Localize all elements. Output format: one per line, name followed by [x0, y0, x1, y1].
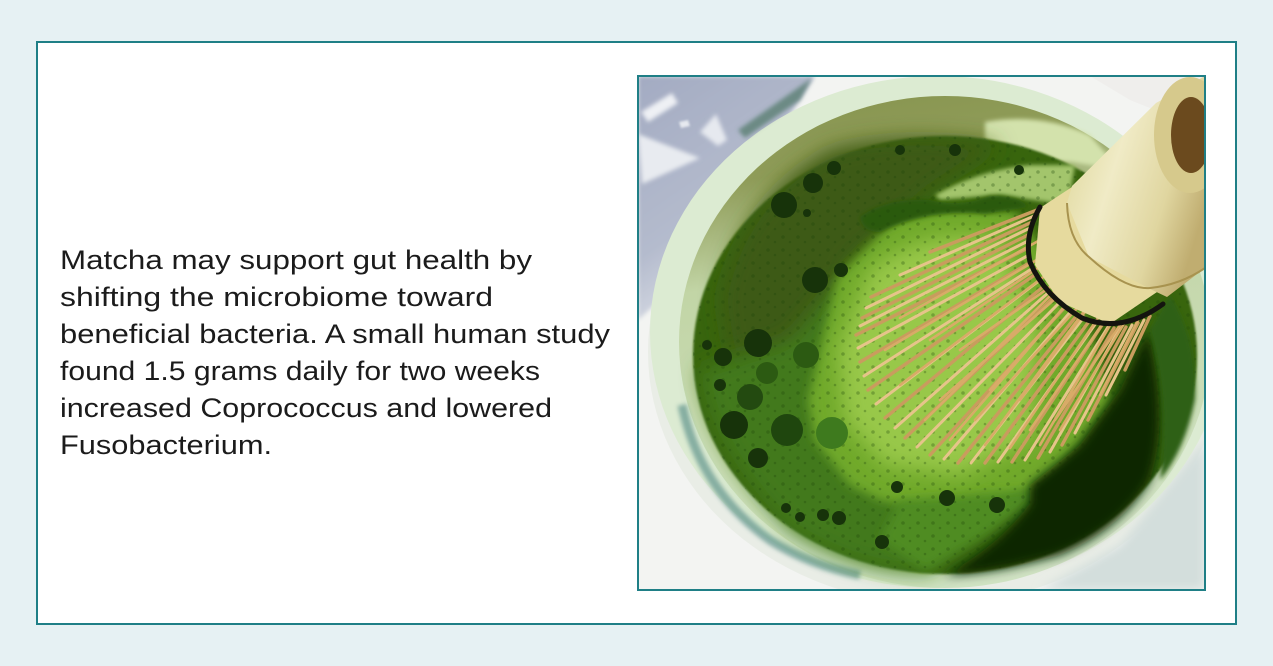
brightest foam [838, 236, 1040, 475]
bowl inner wall [679, 96, 1211, 588]
rim shadow at top left [738, 78, 812, 138]
bamboo whisk [856, 76, 1226, 463]
whisk tines [856, 210, 1150, 463]
right side matcha [1150, 295, 1195, 480]
text block: matcha gut health description [60, 245, 611, 460]
handle opening [1171, 97, 1204, 173]
bright foam [808, 208, 1110, 510]
wall highlight [985, 119, 1120, 170]
photo: matcha bowl with bamboo whisk [638, 76, 1226, 604]
text block: matcha gut health description: found 1.5 grams daily for two weeks [60, 356, 540, 386]
midtone foam [686, 286, 951, 589]
black binding thread [1028, 207, 1163, 324]
lower foam tongue [880, 490, 1030, 570]
bowl exterior [648, 326, 1204, 589]
bowl rim [650, 76, 1226, 588]
bubble texture [690, 130, 1200, 580]
handle rim [1154, 77, 1204, 193]
photo border [638, 76, 1205, 590]
matcha surface [693, 136, 1197, 574]
lower left teal streak [682, 405, 860, 575]
text block: matcha gut health description: Matcha may support gut health by [60, 245, 533, 275]
whisk handle [1067, 76, 1205, 297]
text block: matcha gut health description: increased Coprococcus and lowered [60, 393, 552, 423]
dark shadow under whisk [945, 330, 1160, 575]
dark pool [860, 196, 1028, 232]
text block: matcha gut health description: beneficial bacteria. A small human study [60, 319, 611, 349]
whisk collar [1035, 185, 1160, 324]
handle ring shadow [1067, 203, 1205, 288]
table surface [638, 76, 1205, 590]
text block: matcha gut health description: Fusobacterium. [60, 430, 272, 460]
pale foam at top right [935, 165, 1075, 205]
text block: matcha gut health description: shifting the microbiome toward [60, 282, 493, 312]
bubbles: large dark [702, 144, 1024, 549]
dark top area of matcha [720, 139, 1000, 360]
